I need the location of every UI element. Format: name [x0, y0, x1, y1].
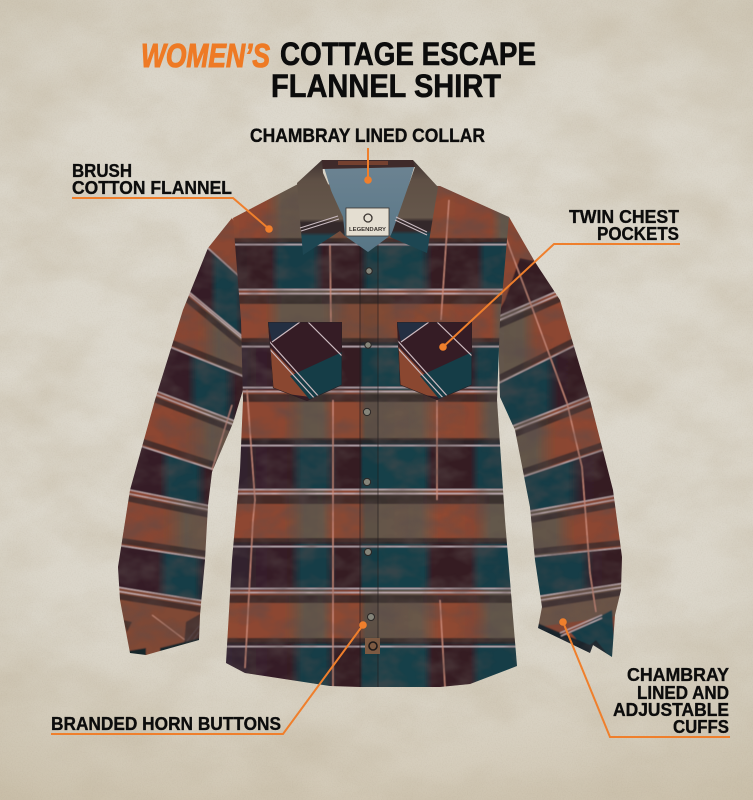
callout: twin chest pockets — [439, 206, 680, 351]
left sleeve — [118, 218, 243, 655]
callout: chambray lined and adjustable cuffs: CHAMBRAY — [627, 664, 730, 685]
shirt body — [220, 180, 520, 692]
left chest pocket — [268, 322, 342, 401]
right sleeve — [498, 217, 622, 657]
buttons — [363, 268, 374, 620]
callout: twin chest pockets: TWIN CHEST — [569, 206, 680, 227]
neck label: LEGENDARY — [349, 227, 386, 233]
collar — [297, 160, 438, 255]
title line two: FLANNEL SHIRT — [271, 68, 501, 104]
callout: brush cotton flannel: BRUSH — [72, 160, 132, 181]
right chest pocket — [397, 322, 472, 400]
shirt illustration — [100, 160, 640, 692]
hem logo patch — [365, 638, 380, 654]
title line one: COTTAGE ESCAPE — [280, 36, 536, 72]
callout: chambray lined and adjustable cuffs: CUFFS — [673, 716, 729, 737]
callout: branded horn buttons — [51, 621, 367, 734]
fabric shading overlay — [110, 180, 630, 690]
neck label — [346, 208, 389, 236]
callout: chambray lined collar: CHAMBRAY LINED COLLAR — [250, 126, 485, 147]
right collar flap — [390, 160, 438, 253]
callout: chambray lined collar — [250, 126, 485, 184]
callout: twin chest pockets: POCKETS — [597, 223, 679, 244]
callout: brush cotton flannel — [72, 160, 273, 233]
placket with seam — [360, 240, 378, 687]
callout: brush cotton flannel: COTTON FLANNEL — [72, 177, 232, 198]
chambray lining — [323, 164, 415, 252]
title — [141, 36, 536, 104]
left collar flap — [297, 160, 345, 255]
title accent: women's: WOMEN’S — [141, 37, 270, 74]
callout: branded horn buttons: BRANDED HORN BUTTONS — [51, 713, 281, 734]
callout: chambray lined and adjustable cuffs — [559, 618, 730, 737]
callout: chambray lined and adjustable cuffs: LINED AND — [637, 682, 729, 703]
callout: chambray lined and adjustable cuffs: ADJUSTABLE — [613, 699, 729, 720]
